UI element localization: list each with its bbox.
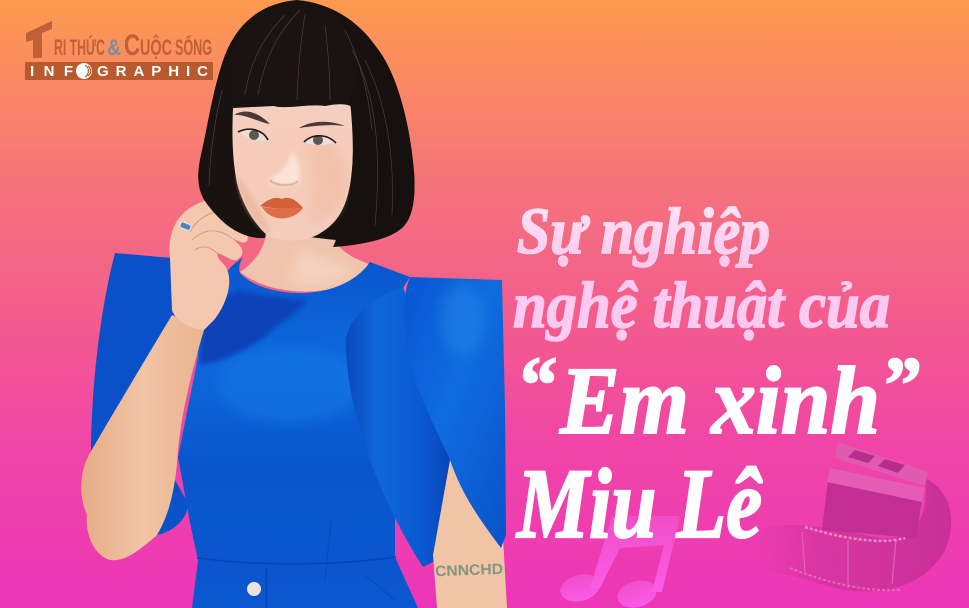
nose <box>267 150 300 186</box>
lips <box>260 198 303 218</box>
finger lines <box>190 211 232 253</box>
hair side right over face <box>333 48 415 247</box>
nostrils <box>270 180 298 185</box>
logo infographic bar <box>25 62 213 80</box>
hair strands highlights <box>209 10 393 225</box>
left eye <box>238 129 268 141</box>
closing quote: ” <box>880 342 920 430</box>
logo wordmark: C <box>124 29 140 62</box>
ring <box>179 221 192 231</box>
right eye <box>304 135 336 145</box>
film strip <box>758 478 951 591</box>
left sleeve lower flap <box>150 480 188 535</box>
logo wordmark: RI THỨC <box>54 35 105 60</box>
hair back <box>198 0 415 247</box>
dress shadow on chest <box>199 290 306 365</box>
face <box>232 102 353 241</box>
dress waist band <box>197 557 396 564</box>
title line 4: Miu Lê <box>515 448 762 559</box>
hand <box>170 197 248 330</box>
right sleeve back petal <box>346 287 451 567</box>
dress button <box>247 582 261 596</box>
dress body <box>178 257 418 608</box>
logo wordmark <box>26 21 212 62</box>
left arm <box>81 315 204 560</box>
left eyebrow <box>234 112 270 124</box>
dress seams <box>266 520 395 608</box>
face shadow <box>236 175 272 236</box>
right eyebrow <box>299 122 345 128</box>
hair side left <box>198 55 262 238</box>
icon: film reel and clapperboard <box>758 442 951 591</box>
dress highlight <box>218 347 362 423</box>
logo infographic bar: GRAPHIC <box>97 63 208 80</box>
logo wordmark: UỘC <box>140 35 172 60</box>
icon: music notes <box>557 516 680 608</box>
logo wordmark: & <box>107 35 121 60</box>
cheek shading <box>300 135 346 225</box>
right arm with tattoo <box>433 460 507 608</box>
logo infographic bar: INF <box>30 63 73 80</box>
title line 1: Sự nghiệp <box>517 195 770 268</box>
portrait of Miu Le in blue dress <box>81 0 507 608</box>
title: Su nghiep nghe thuat cua "Em xinh" Miu Le <box>513 195 920 559</box>
clapperboard <box>822 442 928 538</box>
opening quote: “ <box>516 342 556 430</box>
left sleeve <box>91 253 175 455</box>
logo: Tri Thuc & Cuoc Song Infographic <box>25 21 213 80</box>
right sleeve front petal <box>404 277 506 548</box>
logo wordmark: SỐNG <box>175 34 212 60</box>
neck <box>240 232 372 291</box>
title line 3: Em xinh <box>559 347 880 454</box>
hair fringe <box>224 1 353 108</box>
sleeve highlight <box>440 284 484 356</box>
title line 2: nghệ thuật của <box>513 269 890 342</box>
neck highlight <box>290 248 355 285</box>
tattoo text: CNNCHD <box>435 561 503 580</box>
